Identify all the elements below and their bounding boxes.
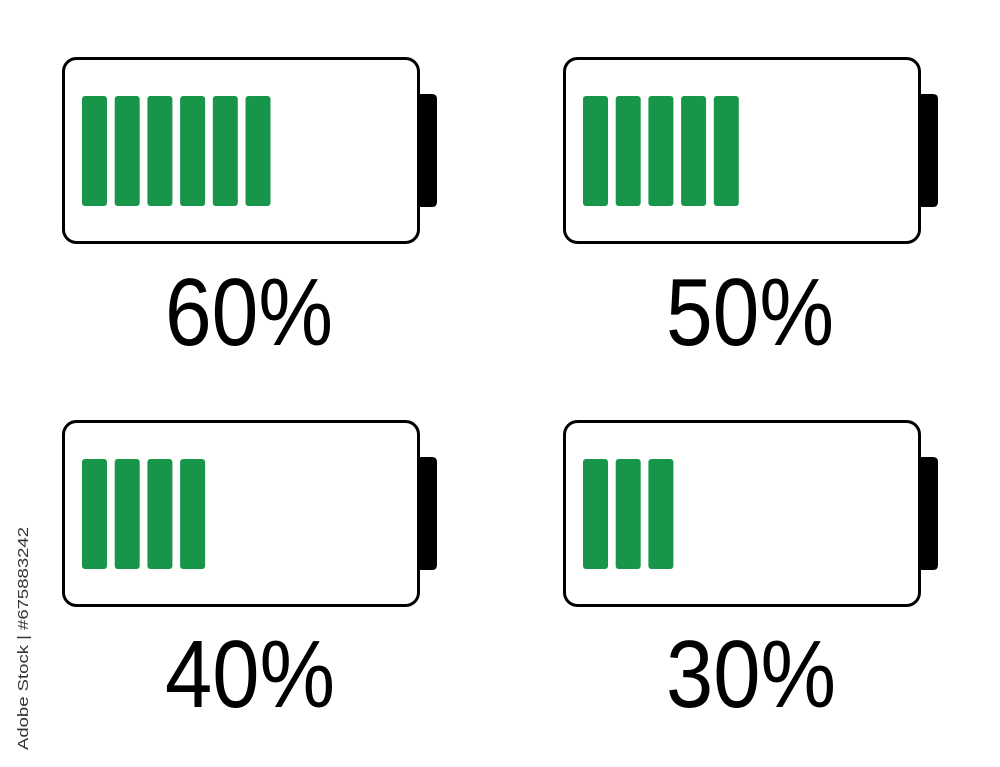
label: 50%: 50% bbox=[666, 259, 834, 366]
battery: 40% bbox=[64, 422, 437, 606]
battery terminal bbox=[921, 94, 938, 207]
battery terminal bbox=[420, 94, 437, 207]
battery body bbox=[64, 58, 418, 242]
battery terminal bbox=[420, 457, 437, 570]
battery body bbox=[64, 422, 418, 606]
charge bars bbox=[583, 459, 673, 569]
battery: 30% bbox=[564, 422, 938, 606]
battery terminal bbox=[921, 457, 938, 570]
battery: 50% bbox=[564, 58, 938, 242]
charge bars bbox=[82, 459, 205, 569]
battery body bbox=[564, 58, 920, 242]
battery: 60% bbox=[64, 58, 437, 242]
charge bars bbox=[583, 96, 739, 206]
label: 60%: 60% bbox=[165, 259, 333, 366]
battery body bbox=[564, 422, 920, 606]
label: 30%: 30% bbox=[666, 621, 836, 728]
watermark credit: Adobe Stock | #675883242 bbox=[15, 527, 32, 750]
label: 40%: 40% bbox=[165, 621, 335, 728]
charge bars bbox=[82, 96, 270, 206]
